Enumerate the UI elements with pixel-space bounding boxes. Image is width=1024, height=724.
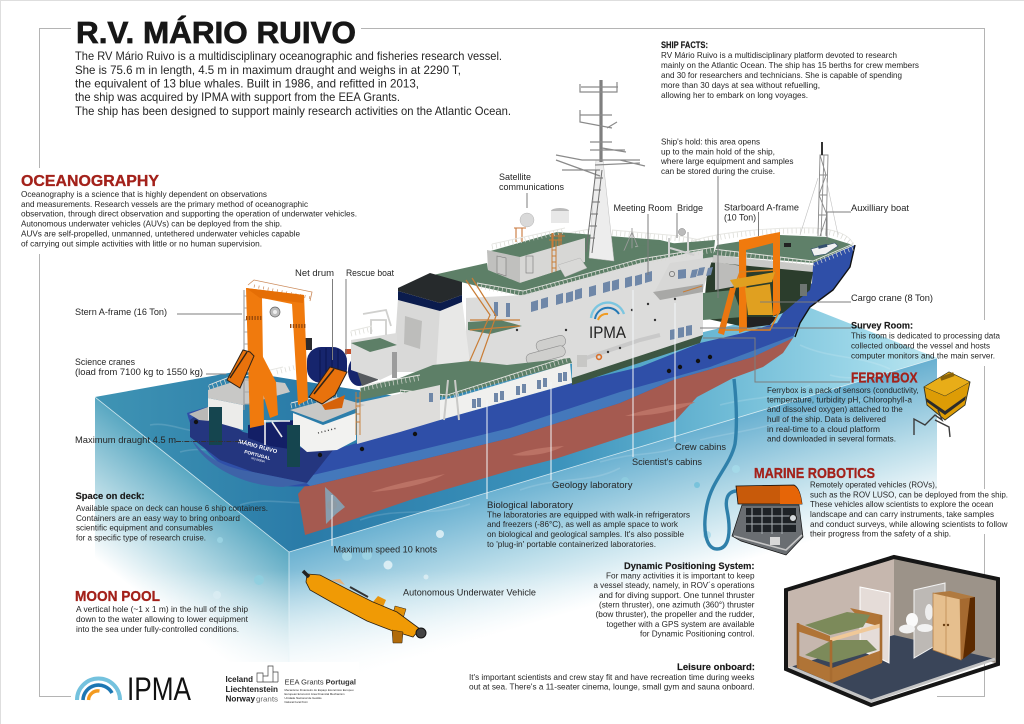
funnel stairs bbox=[466, 278, 520, 367]
eea grants logo: National Focal Point bbox=[284, 700, 308, 704]
moon pool heading: MOON POOL bbox=[75, 589, 160, 605]
ferrybox text: hull of the ship. Data is delivered bbox=[767, 414, 886, 424]
space on deck: for a specific type of research cruise. bbox=[76, 533, 206, 543]
foredeck bitt bbox=[784, 243, 791, 247]
marine robotics heading: MARINE ROBOTICS bbox=[754, 466, 875, 482]
eea grants logo bbox=[219, 662, 359, 712]
ferrybox text: and dissolved oxygen) attached to the bbox=[767, 404, 903, 414]
bridge bbox=[653, 257, 713, 300]
ship's hold note: Ship's hold: this area opens bbox=[661, 136, 760, 146]
cabin rim bbox=[790, 659, 995, 701]
ship part labels: Autonomous Underwater Vehicle bbox=[403, 588, 536, 598]
ship's hold note bbox=[660, 136, 794, 176]
survey room: computer monitors and the main server. bbox=[851, 350, 995, 360]
title: R.V. MÁRIO RUIVO bbox=[76, 15, 356, 50]
satellite drum bbox=[550, 208, 569, 248]
dynamic positioning: For many activities it is important to keep bbox=[606, 571, 755, 581]
marine robotics text: Remotely operated vehicles (ROVs), bbox=[810, 479, 937, 489]
rescue boat bbox=[345, 349, 361, 354]
cabin illustration bbox=[785, 557, 999, 705]
starboard a-frame bbox=[718, 232, 780, 335]
ship logo: IPMA bbox=[589, 323, 627, 342]
ship part labels: (10 Ton) bbox=[724, 213, 756, 223]
ship part labels: Net drum bbox=[295, 268, 334, 278]
stern name: IPQ 840084 bbox=[251, 456, 266, 464]
ship facts: SHIP FACTS: bbox=[661, 40, 708, 50]
foredeck hold wall bbox=[712, 255, 813, 278]
aft house bbox=[351, 310, 397, 380]
second deck rail bbox=[360, 356, 570, 398]
ferrybox device bbox=[914, 372, 970, 437]
ship part labels: Satellite bbox=[499, 172, 531, 182]
intro text: The ship has been designed to support mainly research activities on the Atlantic Ocean. bbox=[75, 105, 511, 118]
hull red underwater bbox=[298, 330, 795, 535]
leisure onboard: Leisure onboard: bbox=[677, 662, 755, 672]
dynamic positioning: together with a GPS system are available bbox=[606, 619, 755, 629]
rudder and propeller bbox=[325, 487, 345, 524]
ship part labels: Cargo crane (8 Ton) bbox=[851, 293, 933, 303]
ferrybox hose bbox=[705, 379, 736, 549]
auv bbox=[303, 571, 426, 643]
ship part labels: Scientist's cabins bbox=[632, 457, 702, 467]
ship hull and superstructure bbox=[187, 80, 855, 549]
dynamic positioning: and for diving support. One tunnel thruster bbox=[599, 590, 755, 600]
transom bbox=[190, 407, 333, 483]
moon pool text: down to the water allowing to lower equipment bbox=[76, 614, 249, 624]
wardrobe bbox=[933, 591, 975, 660]
door bbox=[860, 587, 890, 663]
ship part labels: Stern A-frame (16 Ton) bbox=[75, 307, 167, 317]
ship's hold note: where large equipment and samples bbox=[660, 156, 794, 166]
survey room: This room is dedicated to processing data bbox=[851, 331, 1000, 341]
top deck fittings bbox=[620, 228, 706, 262]
ship facts: allowing her to embark on long voyages. bbox=[661, 90, 808, 100]
space on deck bbox=[76, 491, 268, 543]
stern bulge bbox=[190, 437, 307, 487]
oceanography text: observation, through direct observation and supporting the operation of underwater vehicles. bbox=[21, 209, 357, 219]
moon pool text: into the sea under fully-controlled conditions. bbox=[76, 624, 239, 634]
main deck green bbox=[433, 240, 715, 296]
marine robotics text: and conduct surveys, while allowing scientists to follow bbox=[810, 519, 1008, 529]
deck hatch box bbox=[558, 258, 587, 277]
lower aft wall bbox=[357, 385, 440, 444]
intro text: the equivalent of 13 blue whales. Built in 1986, and refitted in 2013, bbox=[75, 78, 419, 91]
ship facts: RV Mário Ruivo is a multidisciplinary platform devoted to research bbox=[661, 50, 897, 60]
ship facts: mainly on the Atlantic Ocean. The ship has 15 berths for crew members bbox=[661, 60, 919, 70]
intro text: The RV Mário Ruivo is a multidisciplinary oceanographic and fisheries research vessel. bbox=[75, 50, 502, 63]
radar dome bbox=[514, 213, 534, 242]
ferrybox text: Ferrybox is a pack of sensors (conductivity, bbox=[767, 385, 919, 395]
eea grants logo: Norway bbox=[226, 694, 256, 704]
ship part labels: Maximum draught 4.5 m bbox=[75, 435, 176, 445]
survey room: Survey Room: bbox=[851, 321, 913, 331]
wall details bbox=[516, 298, 676, 367]
upper deck block bbox=[487, 238, 585, 283]
dynamic positioning: (stern thruster), one azimuth (360°) thruster bbox=[599, 600, 755, 610]
ship part labels: Starboard A-frame bbox=[724, 203, 799, 213]
stern stairs bbox=[356, 392, 360, 435]
space on deck: scientific equipment and consumables bbox=[76, 523, 213, 533]
ship part labels: (load from 7100 kg to 1550 kg) bbox=[75, 367, 203, 377]
ship facts: and 30 for researchers and technicians. She is capable of spending bbox=[661, 70, 902, 80]
ship part labels: Geology laboratory bbox=[552, 480, 633, 490]
leisure onboard: out at sea. There's a 11-seater cinema, lounge, small gym and sauna onboard. bbox=[469, 682, 754, 692]
ship part labels: Rescue boat bbox=[346, 268, 394, 278]
transom recess bbox=[248, 420, 296, 450]
moon pool text bbox=[76, 604, 249, 634]
ship part labels bbox=[75, 172, 933, 598]
marine robotics text: such as the ROV LUSO, can be deployed from the ship. bbox=[810, 489, 1008, 499]
bunk bed bbox=[797, 608, 882, 683]
ship part labels: communications bbox=[499, 182, 564, 192]
ship part labels: Maximum speed 10 knots bbox=[334, 545, 437, 555]
davit legs bbox=[444, 380, 459, 420]
water left face bbox=[95, 397, 289, 724]
biological laboratory: on biological and geological samples. It's also possible bbox=[487, 529, 684, 539]
bridge radar bbox=[669, 228, 694, 258]
stern right deckhouse bbox=[263, 392, 365, 467]
second deck green bbox=[360, 358, 572, 400]
waterline stripe bbox=[300, 335, 795, 486]
life rafts bbox=[525, 334, 567, 366]
auxiliary boat bbox=[811, 243, 838, 256]
stern cranes bbox=[227, 350, 347, 410]
ship part labels: Crew cabins bbox=[675, 442, 726, 452]
low white block bbox=[440, 363, 572, 420]
ship logo bbox=[589, 303, 627, 342]
ship facts bbox=[661, 40, 919, 100]
ferrybox text: and downloaded in several formats. bbox=[767, 434, 896, 444]
low block windows bbox=[429, 372, 567, 408]
leisure onboard bbox=[469, 662, 755, 692]
space on deck: Space on deck: bbox=[76, 491, 144, 501]
biological laboratory: Biological laboratory bbox=[487, 500, 573, 510]
eea grants logo: Unidade Nacional de Gestão bbox=[284, 696, 322, 700]
oceanography text: and measurements. Research vessels are the primary method of oceanographic bbox=[21, 199, 309, 209]
hull strip bbox=[572, 335, 703, 385]
dynamic positioning: for Dynamic Positioning control. bbox=[640, 628, 754, 638]
oceanography text: Autonomous underwater vehicles (AUVs) can be deployed from the ship. bbox=[21, 219, 282, 229]
ship's hold note: can be stored during the cruise. bbox=[661, 166, 775, 176]
top deck rail behind bbox=[530, 229, 700, 243]
oceanography heading: OCEANOGRAPHY bbox=[21, 173, 159, 190]
space on deck: Available space on deck can house 6 ship containers. bbox=[76, 503, 268, 513]
main wall bbox=[466, 250, 703, 378]
eea grants logo: EEA Grants Portugal bbox=[284, 678, 356, 687]
ship part labels: Auxilliary boat bbox=[851, 203, 909, 213]
stern a-frame bbox=[244, 280, 312, 428]
survey room bbox=[851, 321, 1000, 360]
corner edge bbox=[95, 358, 937, 690]
bathroom bbox=[899, 583, 945, 658]
intro text: She is 75.6 m in length, 4.5 m in maximum draught and weighs in at 2290 T, bbox=[75, 64, 461, 77]
ship part labels: Meeting Room bbox=[614, 203, 672, 213]
rov bbox=[732, 485, 803, 555]
water block bbox=[95, 307, 937, 724]
marine robotics text: their progress from the safety of a ship. bbox=[810, 529, 951, 539]
water right face bbox=[289, 358, 937, 724]
ship part labels: Science cranes bbox=[75, 357, 135, 367]
cabin floor bbox=[790, 635, 995, 702]
cabin walls bbox=[785, 557, 894, 669]
cargo hold bbox=[695, 262, 813, 328]
fore mast bbox=[800, 142, 838, 236]
bubbles bbox=[213, 465, 740, 599]
marine robotics text: landscape and can carry instruments, take samples bbox=[810, 509, 994, 519]
ferrybox text: temperature, turbidity pH, Chlorophyll-a bbox=[767, 395, 912, 405]
portholes bbox=[194, 355, 712, 457]
leisure onboard: It's important scientists and crew stay fit and have recreation time during weeks bbox=[469, 672, 754, 682]
oceanography text: of carrying out simple activities with little or no human supervision. bbox=[21, 238, 262, 248]
eea grants logo: grants bbox=[256, 694, 278, 704]
water surface bbox=[95, 307, 937, 552]
moon pool text: A vertical hole (~1 x 1 m) in the hull of the ship bbox=[76, 604, 248, 614]
ferrybox text bbox=[767, 385, 919, 444]
bow dark edge bbox=[795, 245, 855, 337]
dynamic positioning: (bow thruster), the propeller and the rudder, bbox=[596, 609, 754, 619]
ship facts: more than 30 days at sea without refuelling, bbox=[661, 80, 820, 90]
intro text bbox=[75, 50, 511, 118]
leader lines bbox=[176, 176, 851, 546]
main mast bbox=[556, 80, 645, 261]
stern name: PORTUGAL bbox=[244, 449, 271, 461]
dynamic positioning: a vessel steady, namely, in ROV´s operations bbox=[594, 580, 754, 590]
ferrybox heading: FERRYBOX bbox=[851, 371, 918, 387]
ipma logo bbox=[71, 666, 193, 710]
funnel platform bbox=[468, 320, 522, 334]
stern name: MÁRIO RUIVO bbox=[237, 438, 279, 455]
dynamic positioning bbox=[594, 561, 755, 638]
eea grants logo: Mecanismo Financeiro do Espaço Económico Europeu bbox=[284, 688, 354, 692]
eea grants logo: European Economic Area Financial Mechanism bbox=[284, 692, 345, 696]
stern left deckhouse bbox=[208, 366, 300, 445]
oceanography text: AUVs are self-propelled, unmanned, untethered underwater vehicles capable bbox=[21, 229, 300, 239]
ferrybox text: in real-time to a cloud platform bbox=[767, 424, 880, 434]
deck rail upper block bbox=[492, 228, 565, 247]
stern name bbox=[237, 438, 279, 464]
net drums bbox=[304, 338, 378, 386]
foredeck rail bbox=[692, 228, 853, 264]
biological laboratory: to 'plug-in' portable containerized laboratories. bbox=[487, 539, 656, 549]
marine robotics text bbox=[810, 479, 1008, 539]
orange ladder bbox=[549, 233, 562, 276]
main wall windows bbox=[494, 271, 692, 340]
ipma logo: IPMA bbox=[127, 671, 192, 707]
funnel bbox=[393, 273, 470, 372]
biological laboratory bbox=[487, 500, 690, 549]
dynamic positioning: Dynamic Positioning System: bbox=[624, 561, 754, 571]
foredeck green bbox=[713, 235, 853, 263]
intro text: the ship was acquired by IPMA with support from the EEA Grants. bbox=[75, 91, 400, 104]
main deck front rail bbox=[477, 247, 715, 294]
survey room: collected onboard the vessel and hosts bbox=[851, 340, 990, 350]
eea grants logo: Iceland bbox=[226, 675, 253, 684]
top deck green bbox=[487, 232, 710, 290]
marine robotics text: These vehicles allow scientists to explore the ocean bbox=[810, 499, 994, 509]
oceanography text: Oceanography is a science that is highly dependent on observations bbox=[21, 189, 267, 199]
eea grants logo: Liechtenstein bbox=[226, 685, 278, 694]
water lower fade bbox=[95, 570, 937, 724]
biological laboratory: and freezers (-86°C), as well as ample space to work bbox=[487, 519, 679, 529]
cabin outline bbox=[786, 557, 998, 705]
stern deck corner bbox=[189, 407, 209, 421]
ship part labels: Bridge bbox=[677, 203, 703, 213]
oceanography text bbox=[21, 189, 357, 248]
ship's hold note: up to the main hold of the ship, bbox=[661, 146, 775, 156]
surface ripples bbox=[150, 345, 914, 520]
space on deck: Containers are an easy way to bring onboard bbox=[76, 513, 240, 523]
biological laboratory: The laboratories are equipped with walk-in refrigerators bbox=[487, 509, 690, 519]
hull blue side bbox=[187, 245, 855, 486]
